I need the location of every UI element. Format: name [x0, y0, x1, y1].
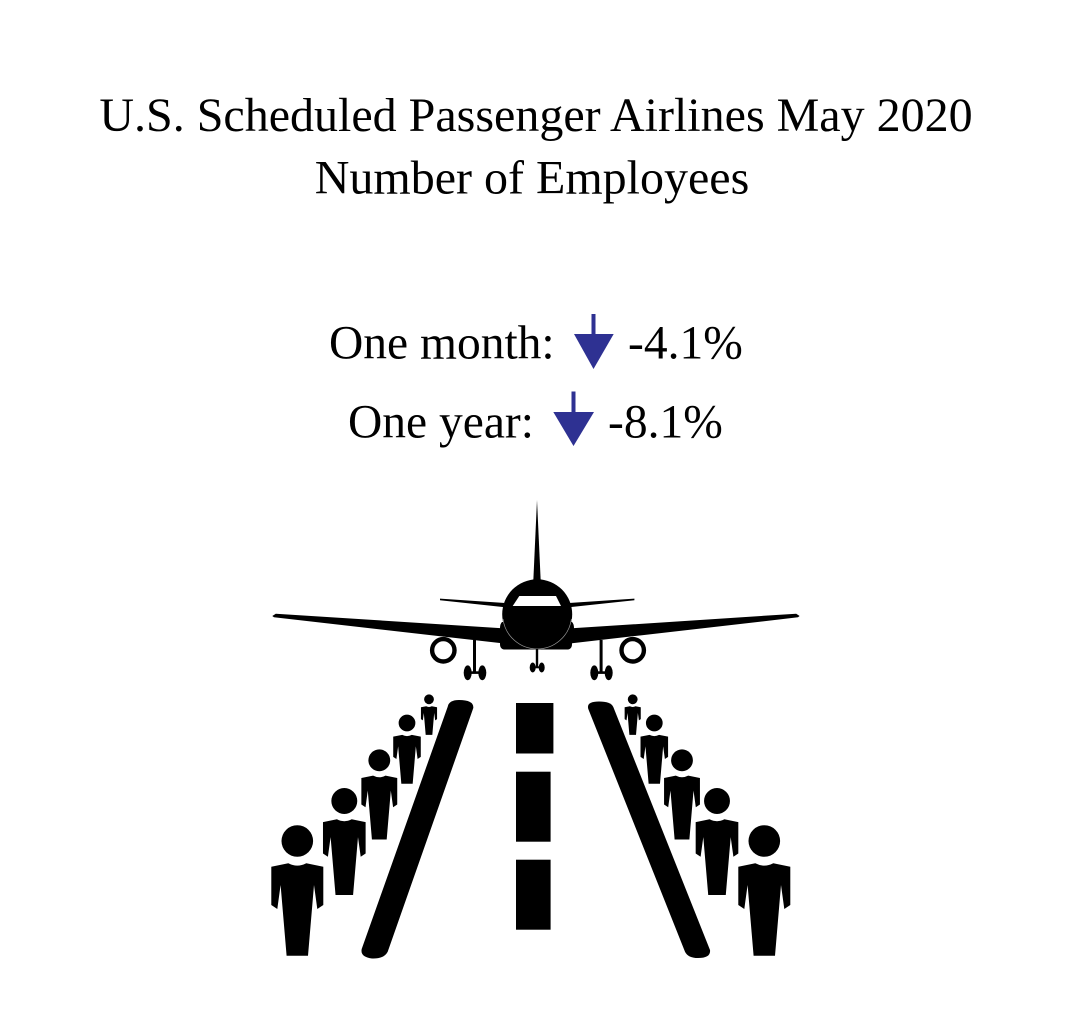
- person 3 left: [361, 749, 397, 839]
- runway right edge: [588, 702, 710, 958]
- stat: one year change: -8.1%: [608, 397, 723, 449]
- stat: one month change: One month:: [329, 318, 555, 370]
- runway left edge: [361, 700, 473, 959]
- person 1 left: [271, 825, 323, 956]
- person 5 right: [625, 694, 641, 735]
- stat: one year change: One year:: [348, 397, 534, 449]
- left employee row: [271, 694, 437, 956]
- person 5 left: [421, 694, 437, 735]
- person 4 left: [393, 715, 421, 784]
- stat: one month change: [329, 314, 743, 370]
- icon: airplane front view: [272, 500, 800, 680]
- title: Number of Employees: [315, 152, 749, 204]
- person 4 right: [641, 715, 668, 784]
- icon: down arrow one month: [574, 314, 614, 369]
- person 2 right: [696, 788, 738, 895]
- right employee row: [625, 694, 790, 956]
- icon: down arrow one year: [553, 392, 594, 446]
- person 2 left: [323, 788, 366, 895]
- person 3 right: [664, 749, 700, 839]
- stat: one month change: -4.1%: [628, 318, 743, 370]
- title: U.S. Scheduled Passenger Airlines May 2020: [99, 89, 973, 142]
- title: [99, 89, 973, 204]
- person 1 right: [738, 825, 790, 956]
- stat: one year change: [348, 392, 723, 449]
- runway center markings: [516, 703, 553, 930]
